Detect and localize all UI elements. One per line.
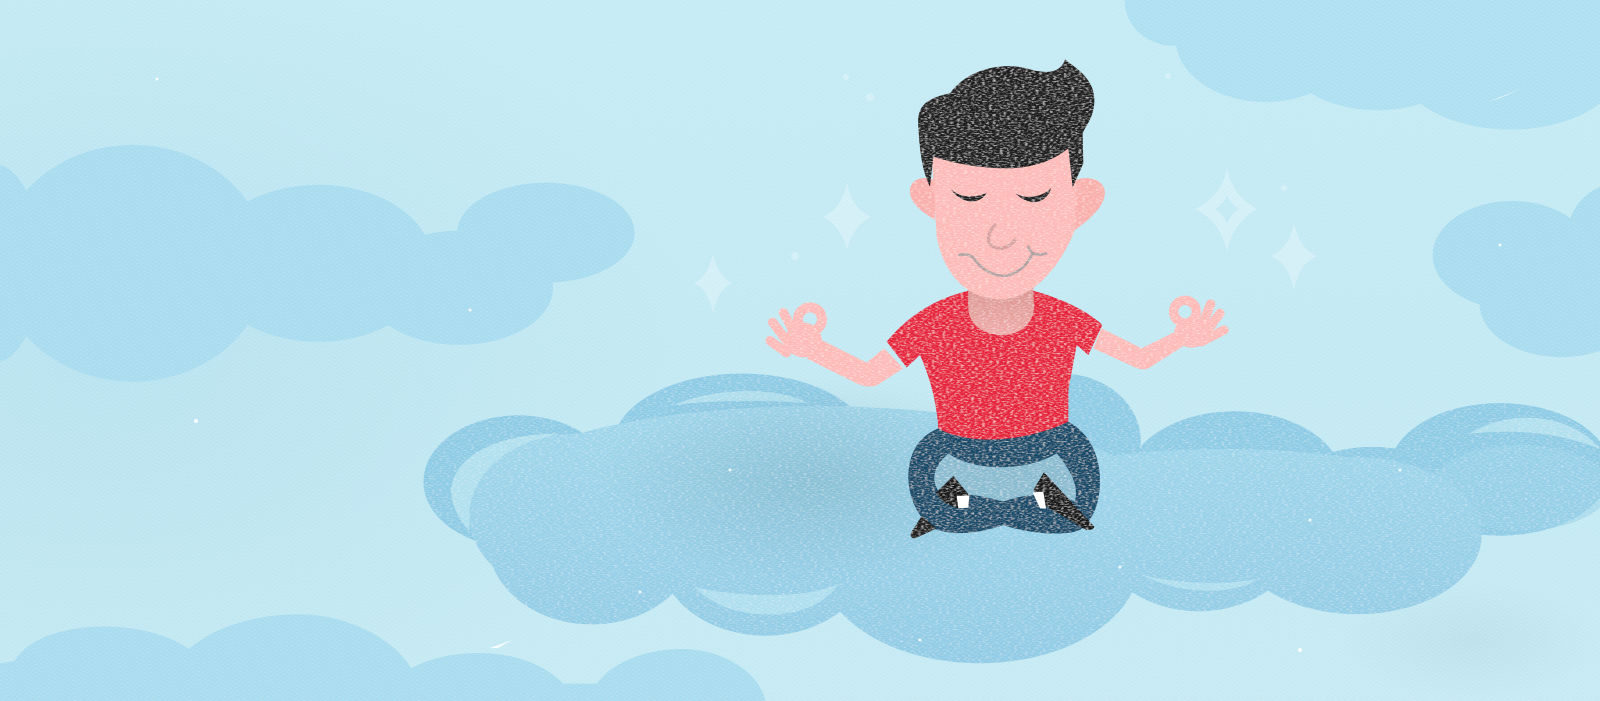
hair	[918, 59, 1094, 187]
right arm	[1093, 328, 1185, 369]
shadow under figure	[602, 378, 1031, 582]
gap between legs	[934, 453, 1076, 502]
eyes	[951, 188, 1051, 202]
white specks	[156, 78, 1528, 652]
main cloud: back lobes	[423, 373, 1600, 573]
legs	[908, 422, 1100, 534]
cloud: bottom left	[0, 614, 765, 701]
nose	[989, 225, 1015, 248]
sparkle: left low	[694, 254, 732, 313]
cloud: right edge	[1433, 184, 1600, 357]
sparkles	[694, 168, 1317, 313]
grunge patch: bottom right	[1340, 580, 1600, 700]
right shoe	[1033, 472, 1094, 530]
shirt	[887, 291, 1102, 440]
left hand	[770, 307, 822, 357]
right hand	[1174, 300, 1224, 348]
sparkle: near head	[823, 183, 871, 250]
mouth	[959, 247, 1046, 276]
left arm	[807, 340, 903, 386]
main cloud	[423, 373, 1600, 663]
main cloud: front lobes	[469, 406, 1600, 663]
sparkle: small right	[1271, 223, 1317, 290]
face	[932, 143, 1077, 299]
main cloud: light crescents	[451, 391, 1600, 531]
cloud: top right	[1124, 0, 1600, 130]
soft dots near head	[791, 73, 1287, 260]
figure: meditating man	[770, 59, 1224, 538]
ears	[910, 178, 1105, 230]
left shoe	[911, 476, 969, 538]
sparkle: large right	[1195, 168, 1257, 252]
cloud: upper left	[0, 145, 635, 382]
neck	[968, 287, 1034, 335]
main cloud: lower crescents	[694, 574, 1257, 615]
